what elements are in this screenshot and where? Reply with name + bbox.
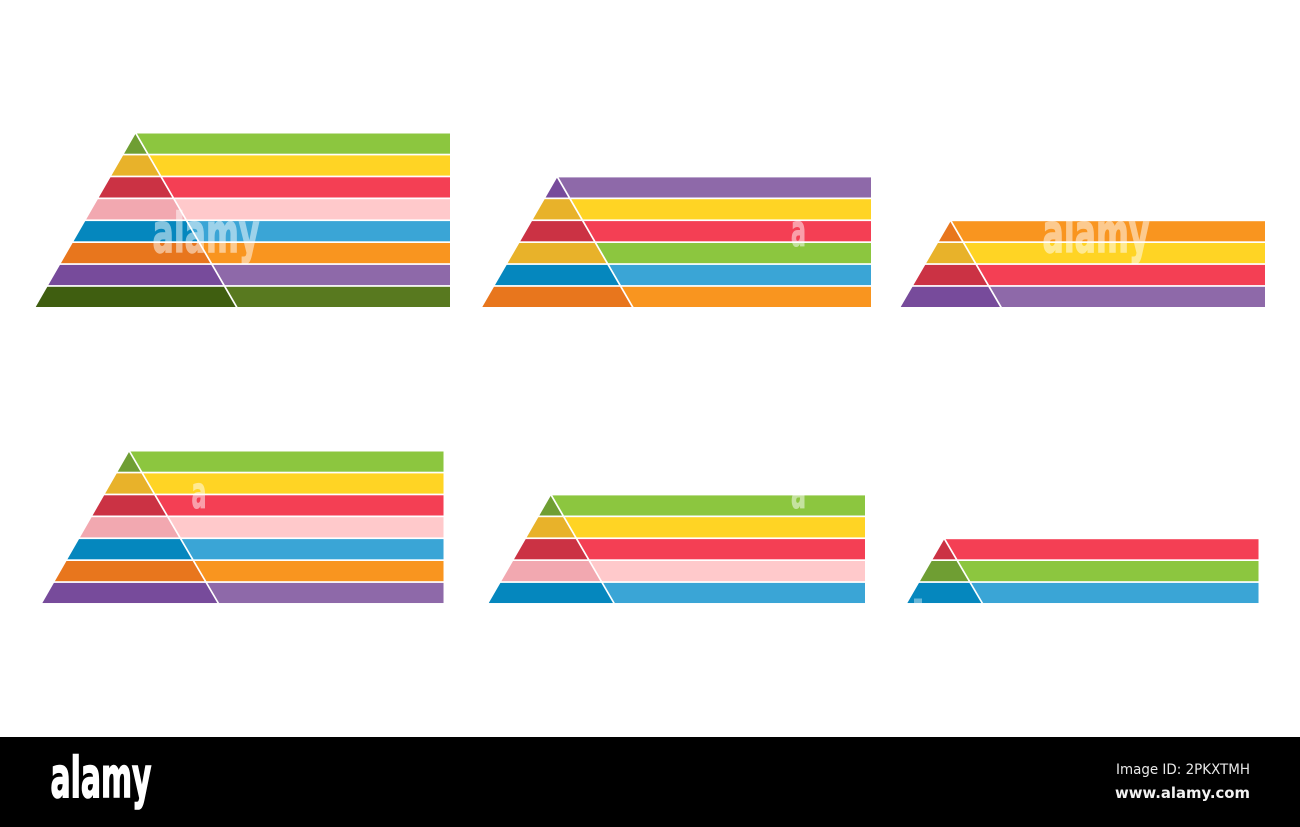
tier 2: yellow bbox=[105, 473, 444, 494]
tier 3: red bbox=[901, 265, 1265, 285]
watermark: letter a on fourth chart: a bbox=[192, 468, 206, 519]
website: www.alamy.com bbox=[1115, 784, 1250, 802]
tier 7: purple bbox=[36, 265, 450, 285]
tier 1: red bbox=[907, 539, 1259, 559]
tier 1: green bbox=[539, 495, 865, 516]
watermark: letter a on fifth chart: a bbox=[791, 468, 806, 519]
tier 2: green bbox=[907, 561, 1259, 581]
pyramid chart: 4 tiers bbox=[901, 221, 1265, 307]
tier 5: blue bbox=[36, 221, 450, 241]
pyramid chart: 8 tiers bbox=[36, 133, 450, 307]
tier 4: pink bbox=[86, 199, 450, 220]
tier 4: purple bbox=[901, 287, 1265, 307]
tier 4: pink bbox=[489, 561, 865, 581]
footer band bbox=[0, 737, 1300, 827]
tier 6: orange bbox=[36, 243, 450, 263]
image id: Image ID: 2PKXTMH bbox=[1116, 762, 1250, 778]
watermark: alamy over third chart: alamy bbox=[1042, 202, 1150, 265]
tier 1: green bbox=[124, 134, 450, 154]
tier 3: red bbox=[482, 221, 871, 241]
pyramid chart: 5 tiers bbox=[489, 495, 865, 604]
tier 5: blue bbox=[42, 539, 444, 559]
watermark: fragment on sixth chart bbox=[914, 598, 922, 603]
tier 2: yellow bbox=[111, 155, 450, 176]
tier 3: blue bbox=[907, 583, 1259, 603]
footer logo: alamy bbox=[50, 746, 152, 811]
tier 7: purple bbox=[42, 583, 444, 603]
pyramid chart: 3 tiers bbox=[907, 539, 1259, 604]
tier 2: yellow bbox=[489, 517, 865, 537]
pyramid chart: 6 tiers bbox=[482, 177, 871, 307]
tier 5: blue bbox=[482, 265, 871, 285]
tier 4: pink bbox=[42, 517, 444, 537]
watermark: letter a on second chart: a bbox=[791, 206, 806, 257]
watermark: alamy over first chart: alamy bbox=[152, 202, 260, 265]
tier 6: orange bbox=[482, 287, 871, 307]
pyramid chart: 7 tiers bbox=[42, 451, 444, 604]
tier 3: red bbox=[92, 495, 444, 516]
tier 2: yellow bbox=[901, 243, 1265, 263]
tier 1: orange bbox=[901, 221, 1265, 241]
tier 2: yellow bbox=[532, 199, 871, 220]
tier 5: blue bbox=[489, 583, 865, 603]
tier 8: dark green bbox=[36, 287, 450, 307]
tier 1: purple bbox=[546, 177, 871, 198]
tier 1: green bbox=[118, 452, 444, 472]
tier 4: green with amber left part bbox=[482, 243, 871, 263]
tier 3: red bbox=[98, 177, 450, 198]
tier 6: orange bbox=[42, 561, 444, 581]
tier 3: red bbox=[489, 539, 865, 559]
